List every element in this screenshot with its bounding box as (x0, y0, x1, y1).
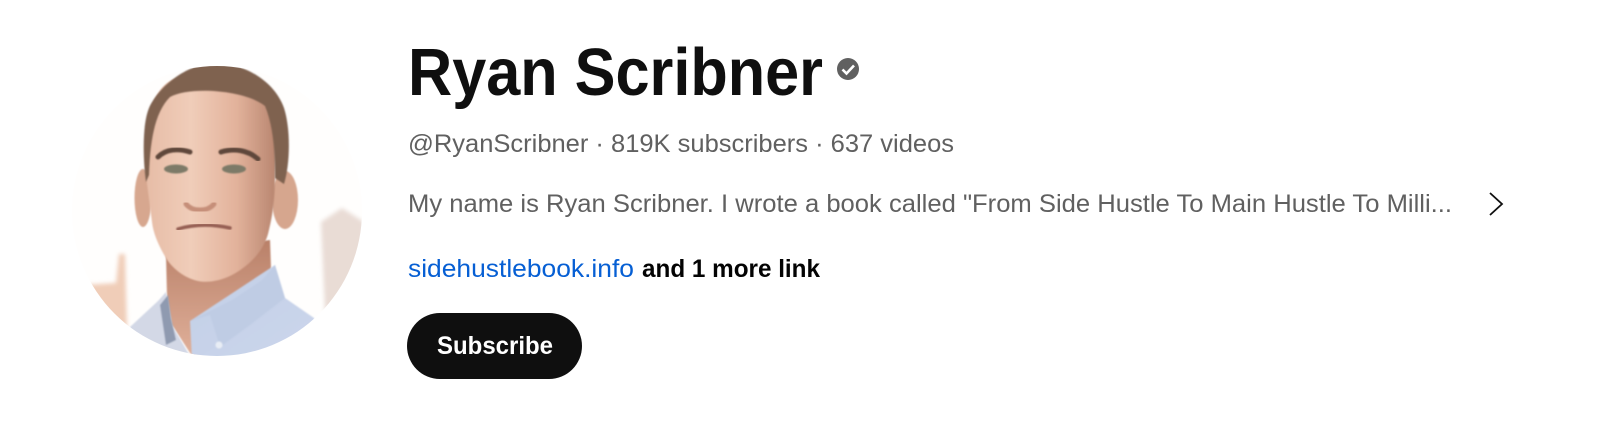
ears (134, 169, 298, 229)
right shoulder (189, 266, 314, 356)
left placket shadow (160, 295, 176, 345)
right eye (222, 164, 246, 174)
avatar portrait (91, 66, 362, 356)
links (408, 255, 820, 283)
right ear (272, 171, 298, 229)
channel stats: @RyanScribner · 819K subscribers · 637 videos (408, 130, 954, 158)
right collar (222, 290, 284, 342)
eyes (164, 164, 246, 174)
arrow: expand description (1490, 193, 1502, 215)
background building right (321, 208, 364, 312)
right eyebrow (221, 150, 258, 159)
hair (144, 63, 289, 184)
face (146, 74, 275, 282)
nose (186, 204, 214, 210)
website link: sidehustlebook.info (408, 255, 634, 283)
collar button (216, 342, 222, 348)
background building left (91, 252, 130, 326)
verified badge (837, 58, 859, 80)
channel name: Ryan Scribner (408, 35, 823, 110)
channel header (91, 46, 1504, 379)
left ear (134, 169, 152, 227)
subscribe button: Subscribe (437, 332, 553, 360)
left shoulder and collar (130, 292, 189, 353)
more links text: and 1 more link (642, 255, 820, 283)
left eye (164, 164, 188, 174)
left eyebrow (158, 150, 190, 157)
mouth (178, 225, 230, 229)
subscribe button (407, 313, 582, 379)
neck (166, 240, 272, 356)
shirt (130, 264, 314, 356)
channel description: My name is Ryan Scribner. I wrote a book called "From Side Hustle To Main Hustle To Milli... (408, 190, 1452, 218)
eyebrows (158, 150, 258, 159)
